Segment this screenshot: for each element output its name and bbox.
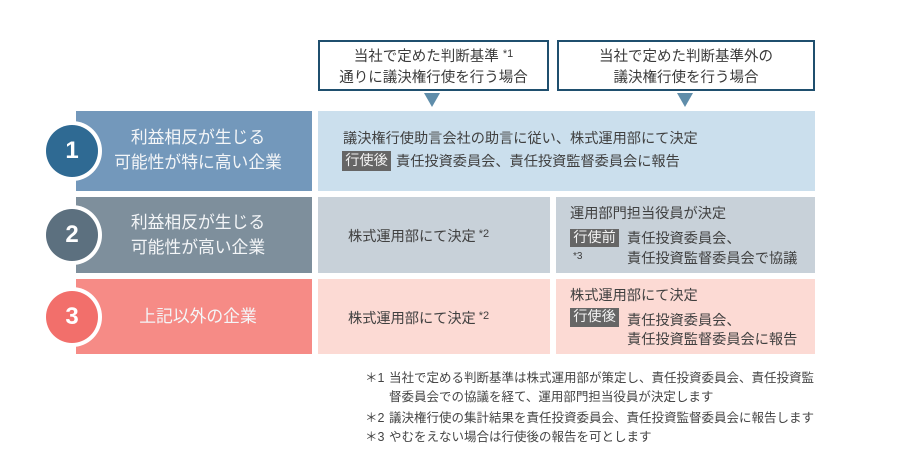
tag: after exercise: 行使後: [345, 153, 388, 169]
row 3 column 2 report text: 責任投資委員会、: [627, 313, 741, 329]
tag: after exercise: 行使後: [573, 309, 616, 325]
row 2 column 1 text: 株式運用部にて決定 *2: [348, 228, 489, 245]
panel: row 2 column 2: 責任投資監督委員会で協議: [627, 251, 797, 267]
footnotes: やむをえない場合は行使後の報告を可とします: [389, 430, 652, 444]
panel: row 3 label: [76, 279, 312, 354]
footnotes: 督委員会での協議を経て、運用部門担当役員が決定します: [389, 390, 713, 404]
row 1 heading: 利益相反が生じる: [131, 128, 265, 147]
row 1 report text: 責任投資委員会、責任投資監督委員会に報告: [396, 154, 680, 170]
header: column 1 criteria box: 通りに議決権行使を行う場合: [339, 70, 528, 86]
footnote 2: ＊2: [365, 411, 384, 425]
arrow: column 2 down: [677, 93, 693, 107]
panel: row 2 column 2: [556, 197, 815, 273]
panel: row 2 label: [76, 197, 312, 273]
header: column 2 criteria box: [557, 40, 815, 91]
panel: row 3 column 2: 責任投資監督委員会に報告: [627, 332, 797, 348]
footnote mark 3: *3: [573, 251, 582, 262]
row 3 column 1 text: 株式運用部にて決定 *2: [348, 310, 489, 327]
header text: column 1: 当社で定めた判断基準 *1: [354, 48, 513, 65]
row 2 column 2 decision: 運用部門担当役員が決定: [570, 206, 726, 222]
header text: column 2: 当社で定めた判断基準外の: [599, 49, 773, 65]
arrow: column 1 down: [424, 93, 440, 107]
icon: number 2: [46, 209, 98, 261]
tag: before exercise: 行使前: [573, 230, 616, 246]
row 3 heading: 上記以外の企業: [139, 307, 257, 326]
panel: row 2 label: 可能性が高い企業: [131, 238, 265, 257]
icon: number 1: 1: [65, 137, 79, 164]
row 3 column 2 decision: 株式運用部にて決定: [570, 288, 698, 304]
panel: row 1 decision: [318, 111, 815, 191]
row 2 heading: 利益相反が生じる: [131, 213, 265, 232]
footnote 3: ＊3: [365, 430, 384, 444]
footnotes: 当社で定める判断基準は株式運用部が策定し、責任投資委員会、責任投資監: [389, 371, 814, 385]
row 1 decision text: 議決権行使助言会社の助言に従い、株式運用部にて決定: [343, 131, 698, 147]
footnote 1: ＊1: [365, 371, 384, 385]
header: column 2 criteria box: 議決権行使を行う場合: [614, 70, 758, 86]
header: column 1 criteria box: [318, 40, 549, 91]
panel: row 1 label: [76, 111, 312, 191]
icon: number 3: [46, 291, 98, 343]
panel: row 3 column 1: [318, 279, 550, 354]
icon: number 2: 2: [65, 221, 79, 248]
panel: row 1 label: 可能性が特に高い企業: [114, 153, 282, 172]
panel: row 2 column 1: [318, 197, 550, 273]
icon: number 1: [46, 125, 98, 177]
row 2 column 2 consult text: 責任投資委員会、: [627, 231, 741, 247]
panel: row 3 column 2: [556, 279, 815, 354]
footnotes: [365, 371, 814, 444]
tag: after exercise: [342, 151, 391, 171]
icon: number 3: 3: [65, 303, 79, 330]
footnotes: 議決権行使の集計結果を責任投資委員会、責任投資監督委員会に報告します: [389, 411, 814, 425]
